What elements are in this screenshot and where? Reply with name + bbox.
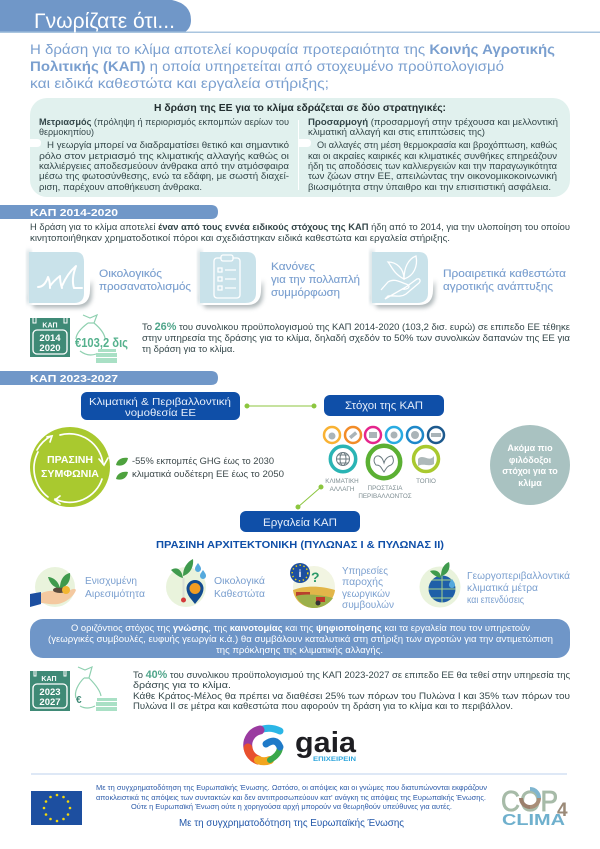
disclaimer text: Ούτε η Ευρωπαϊκή Ένωση ούτε η χορηγούσα αρχή μπορούν να θεωρηθούν υπεύθυνες για αυτές. — [131, 802, 452, 811]
icon: calendar 2023-2027 — [30, 669, 70, 711]
tool: enhanced conditionality: Ενισχυμένη — [85, 575, 137, 587]
logo: COP4 CLIMA: 4 — [557, 800, 568, 821]
panel: two climate strategies — [30, 98, 570, 197]
disclaimer text: αποκλειστικά τις απόψεις των συντακτών και δεν αντιπροσωπεύουν κατ' ανάγκη τις απόψεις της Ευρωπαϊκής Ένωσης. — [96, 793, 486, 802]
text: 26% budget: στην υπηρεσία της δράσης για το κλίμα, δηλαδή σχεδόν το 50% των συνολικών δαπανών της ΕΕ για — [142, 333, 570, 344]
button: EU climate legislation: νομοθεσία ΕΕ — [125, 407, 196, 419]
icon: money bag euro: € — [76, 695, 82, 706]
left column: mitigation: Μετριασμός (πρόληψη ή περιορισμός εκπομπών αερίων του — [39, 117, 289, 127]
labels of objectives: ΠΕΡΙΒΑΛΛΟΝΤΟΣ — [358, 493, 412, 500]
label: συμμόρφωση — [271, 287, 340, 299]
tool: agri-environment-climate measures: και επενδύσεις — [467, 594, 524, 606]
icon: hand with plant — [381, 256, 420, 299]
icon: plant thermometer and pin — [171, 559, 193, 578]
icon: money bag 103,2: €103,2 δις — [75, 336, 128, 350]
connectors — [245, 404, 323, 509]
logo: COP4 CLIMA: COP — [501, 786, 558, 818]
tool: eco-schemes: Οικολογικά — [214, 575, 265, 587]
icon: money bag euro — [75, 667, 117, 711]
circle: more ambitious targets: φιλόδοξοι — [509, 455, 552, 465]
circle: more ambitious targets: κλίμα — [518, 478, 542, 488]
tool: eco-schemes: Καθεστώτα — [214, 588, 265, 600]
labels of objectives: ΤΟΠΙΟ — [416, 478, 436, 485]
icon: fields and tractor — [293, 587, 335, 608]
button: CAP tools: Εργαλεία ΚΑΠ — [263, 517, 337, 529]
section bar: CAP 2023-2027: ΚΑΠ 2023-2027 — [30, 373, 118, 385]
right column: adaptation: ήδη τις αποδόσεις των καλλιεργειών και την παραγωγικότητα — [308, 161, 557, 171]
EU flag — [31, 791, 82, 825]
circle: more ambitious targets — [490, 425, 570, 505]
tool: farm advisory services: γεωργικών — [342, 588, 390, 600]
left column: mitigation: Η γεωργία μπορεί να διαδραματίσει θετικό και σημαντικό — [47, 140, 289, 150]
intro heading: Η δράση για το κλίμα αποτελεί κορυφαία προτεραιότητα της Κοινής Αγροτικής — [30, 41, 555, 57]
left column: mitigation: καλλιέργειες αποδεσμεύουν άνθρακα από την ατμόσφαιρα — [39, 161, 289, 171]
labels of objectives: ΚΛΙΜΑΤΙΚΗ — [325, 478, 359, 485]
card: cross-compliance rules — [198, 250, 360, 308]
header tab with title: Γνωρίζατε ότι... — [34, 10, 175, 33]
icon: calendar 2014-2020: 2014 — [39, 333, 61, 344]
label: Προαιρετικά καθεστώτα — [443, 268, 567, 280]
tool: farm advisory services: ? — [311, 569, 320, 585]
co-funded line: Με τη συγχρηματοδότηση της Ευρωπαϊκής Ένωσης — [179, 817, 404, 829]
coins — [96, 349, 117, 363]
button: CAP tools — [240, 511, 360, 532]
icon: calendar 2014-2020: 2020 — [39, 343, 61, 354]
tool: agri-environment-climate measures: κλιματικά μέτρα — [467, 582, 538, 594]
label: για την πολλαπλή — [271, 274, 360, 286]
labels of objectives — [325, 478, 436, 500]
right column: adaptation — [308, 117, 558, 192]
icon: globe with plant — [428, 576, 456, 602]
intro heading: και ειδικά καθεστώτα και εργαλεία στήριξης; — [30, 75, 329, 91]
button: EU climate legislation: Κλιματική & Περιβαλλοντική — [89, 396, 231, 408]
footer rule — [31, 774, 567, 775]
icon: green deal circle: ΠΡΑΣΙΝΗ — [47, 455, 93, 466]
logo: gaia: gaia — [295, 727, 357, 759]
right column: adaptation: και οι ακραίες καιρικές και κλιματικές συνθήκες επηρεάζουν — [308, 151, 558, 161]
text: 40% budget — [133, 669, 570, 712]
intro heading: Πολιτικής (ΚΑΠ) η οποία υπηρετείται από στοχευμένο προϋπολογισμό — [30, 58, 504, 74]
disclaimer text — [96, 783, 487, 811]
right column: adaptation: βιωσιμότητα στην ύπαιθρο και την επισιτιστική ασφάλεια. — [308, 182, 551, 192]
icon: hand with seedling — [40, 589, 76, 604]
circle: more ambitious targets: στόχοι για το — [502, 466, 558, 476]
icon: clipboard — [214, 255, 240, 298]
labels of objectives: ΑΛΛΑΓΗ — [330, 486, 355, 493]
icon: butterfly — [374, 456, 393, 472]
button: EU climate legislation — [81, 392, 240, 420]
right column: adaptation: Προσαρμογή (προσαρμογή στην τρέχουσα και μελλοντική — [308, 117, 558, 127]
text: CAP 2014-2020 intro — [30, 222, 570, 244]
disclaimer text: Με τη συγχρηματοδότηση της Ευρωπαϊκής Ένωσης. Ωστόσο, οι απόψεις και οι γνώμες που διατυπώνονται εκφράζουν — [96, 783, 487, 792]
tool: agri-environment-climate measures: Γεωργοπεριβαλλοντικά — [467, 570, 570, 582]
section bar: CAP 2014-2020: ΚΑΠ 2014-2020 — [30, 207, 118, 219]
icon: grass — [38, 266, 82, 288]
left column: mitigation: ρόλο στον μετριασμό της κλιματικής αλλαγής καθώς οι — [39, 151, 289, 161]
heading: green architecture: ΠΡΑΣΙΝΗ ΑΡΧΙΤΕΚΤΟΝΙΚΗ (ΠΥΛΩΝΑΣ Ι & ΠΥΛΩΝΑΣ ΙΙ) — [156, 539, 444, 551]
right column: adaptation: των ζώων στην ΕΕ, απειλώντας την οικονομικοκοινωνική — [308, 171, 557, 181]
intro heading — [30, 41, 555, 91]
text: 40% budget: Το 40% του συνολικου προϋπολογισμού της ΚΑΠ 2023-2027 σε επιπεδο ΕΕ θα τεθεί στην υπηρεσία της — [133, 669, 570, 681]
text: CAP 2014-2020 intro: Η δράση για το κλίμα αποτελεί έναν από τους εννέα ειδικούς στόχους της ΚΑΠ ήδη από το 2014, για την υλοποίηση του οποίου — [30, 222, 570, 233]
icon: calendar 2023-2027: ΚΑΠ — [41, 676, 57, 683]
panel: horizontal objective of knowledge — [30, 619, 570, 658]
icon: globe — [336, 452, 350, 466]
logo: gaia: ΕΠΙΧΕΙΡΕΙΝ — [313, 757, 356, 763]
tool: agri-environment-climate measures — [420, 562, 570, 608]
icon: leaf — [116, 458, 128, 466]
logo: COP4 CLIMA — [501, 786, 568, 829]
section bar: CAP 2023-2027 — [0, 371, 218, 385]
icon: calendar 2014-2020: ΚΑΠ — [42, 322, 58, 330]
icon: money bag 103,2 — [75, 315, 128, 363]
tool: farm advisory services: i — [299, 569, 302, 580]
tool: eco-schemes — [166, 559, 265, 607]
left column: mitigation: μέσω της φωτοσύνθεσης, ενώ τα εδάφη, με σωστή διαχεί- — [39, 171, 289, 181]
tool: enhanced conditionality — [30, 567, 145, 607]
text: 26% budget: Το 26% του συνολικου προϋπολογισμού της ΚΑΠ 2014-2020 (103,2 δισ. ευρώ) σε επιπεδο ΕΕ τέθηκε — [142, 321, 571, 333]
CAP objectives icons — [324, 427, 444, 478]
text: 26% budget — [142, 321, 571, 355]
icon: calendar 2023-2027: 2027 — [39, 697, 61, 708]
icon: calendar 2014-2020 — [30, 316, 70, 357]
label: αγροτικής ανάπτυξης — [443, 281, 553, 293]
text: 40% budget: Κάθε Κράτος-Μέλος θα πρέπει να διαθέσει 25% των πόρων του Πυλώνα Ι και 35% των πόρων του — [133, 691, 570, 702]
logo: gaia — [248, 727, 357, 763]
left column: mitigation: ριση, παρέχουν αποθήκευση άνθρακα. — [39, 182, 202, 192]
tool: farm advisory services — [290, 563, 394, 611]
button: CAP objectives — [324, 395, 444, 416]
panel: horizontal objective of knowledge: Ο οριζόντιος στόχος της γνώσης, της καινοτομίας και της ψηφιοποίησης και τα εργαλεία που τον υπηρετούν — [71, 623, 530, 634]
panel heading: Η δράση της ΕΕ για το κλίμα εδράζεται σε δύο στρατηγικές: — [154, 103, 446, 114]
icon: green deal circle — [30, 427, 110, 507]
right column: adaptation: Οι αλλαγές στη μέση θερμοκρασία και βροχόπτωση, καθώς — [317, 140, 557, 150]
icon: calendar 2023-2027: 2023 — [39, 687, 61, 698]
label — [443, 268, 567, 293]
coins — [96, 698, 117, 711]
circle: more ambitious targets: Ακόμα πιο — [507, 443, 553, 453]
card: voluntary rural development schemes — [370, 250, 567, 308]
tool: farm advisory services: παροχής — [342, 576, 383, 588]
icon: green deal circle: ΣΥΜΦΩΝΙΑ — [41, 469, 99, 480]
text: 40% budget: Πυλώνα ΙΙ σε μέτρα και καθεστώτα που αφορούν τη δράση για το κλίμα και το περιβάλλον. — [133, 701, 513, 712]
icon: EU info badge — [290, 563, 310, 583]
text: CAP 2014-2020 intro: κινητοποιήθηκαν χρηματοδοτικοί πόροι και σχεδιάστηκαν ειδικά καθεστώτα και εργαλεία στήριξης. — [30, 233, 450, 244]
section bar: CAP 2014-2020 — [0, 205, 218, 219]
labels of objectives: ΠΡΟΣΤΑΣΙΑ — [368, 485, 403, 492]
label: Κανόνες — [271, 261, 315, 273]
tool: farm advisory services: συμβουλών — [342, 599, 394, 611]
right column: adaptation: κλιματική αλλαγή και στις επιπτώσεις της) — [308, 127, 485, 137]
list: green deal targets — [116, 456, 284, 480]
tool: farm advisory services: Υπηρεσίες — [342, 565, 388, 577]
button: CAP objectives: Στόχοι της ΚΑΠ — [345, 400, 423, 412]
left column: mitigation — [39, 117, 289, 192]
header tab with title — [0, 0, 600, 33]
label: προσανατολισμός — [99, 281, 191, 293]
logo: COP4 CLIMA: CLIMA — [502, 812, 565, 829]
card: eco orientation — [27, 250, 191, 308]
panel: horizontal objective of knowledge: (γεωργικές συμβουλές, ευφυής γεωργία κ.ά.) θα συμβάλουν καταλυτικά στη στήριξη των αγροτών για την αντιμετώπιση — [48, 634, 553, 645]
text: 40% budget: δράσης για το κλίμα. — [133, 680, 231, 691]
label — [99, 268, 191, 293]
text: 26% budget: τη δράση για το κλίμα. — [142, 344, 235, 355]
list: green deal targets: κλιματικά ουδέτερη ΕΕ έως το 2050 — [132, 469, 284, 480]
tool: enhanced conditionality: Αιρεσιμότητα — [85, 588, 145, 600]
icon: landscape — [418, 456, 434, 466]
list: green deal targets: -55% εκπομπές GHG έως το 2030 — [132, 456, 274, 467]
icon: leaf — [116, 472, 128, 480]
panel: horizontal objective of knowledge: της πρόκλησης της κλιματικής αλλαγής. — [216, 645, 383, 656]
label — [271, 261, 360, 299]
label: Οικολογικός — [99, 268, 162, 280]
left column: mitigation: θερμοκηπίου) — [39, 127, 94, 137]
